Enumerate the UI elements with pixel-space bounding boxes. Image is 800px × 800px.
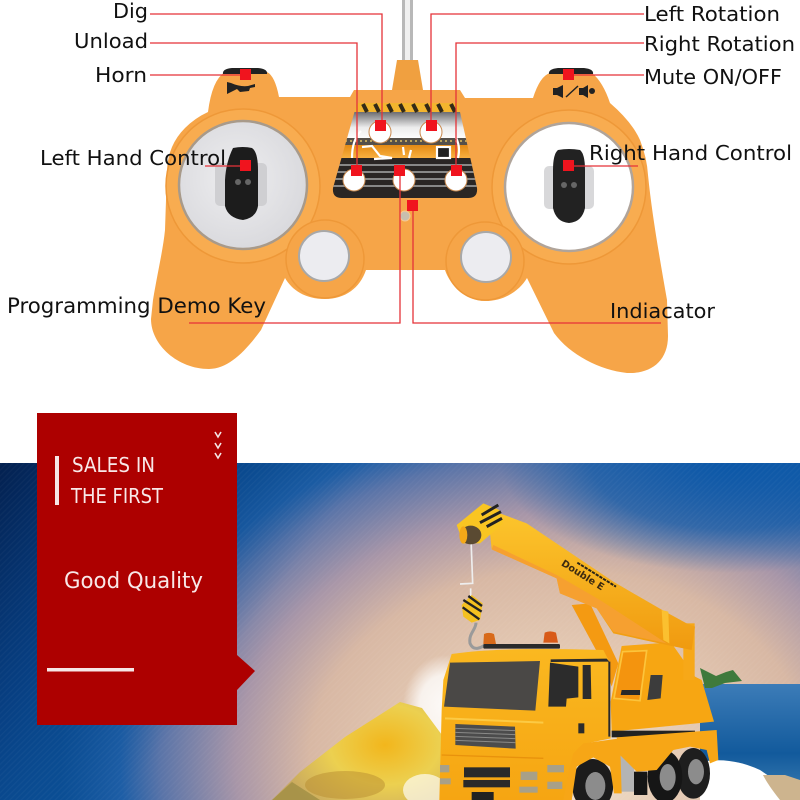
heading: SALES IN: SALES IN — [72, 453, 155, 477]
label: Indiacator: Indiacator — [610, 299, 716, 323]
mute icon — [553, 85, 595, 98]
antenna — [392, 0, 423, 90]
right joystick — [492, 110, 646, 264]
label: Programming Demo Key: Programming Demo Key — [7, 294, 266, 318]
label: Mute ON/OFF: Mute ON/OFF — [644, 65, 782, 89]
text: Good Quality: Good Quality — [64, 569, 203, 594]
horn icon — [227, 82, 255, 94]
chevrons — [215, 432, 221, 458]
crane cabin — [611, 623, 714, 732]
remote controller — [151, 0, 668, 373]
rope and hook — [460, 530, 487, 648]
front fender — [563, 738, 622, 800]
label: Left Rotation: Left Rotation — [644, 2, 780, 26]
sea and island — [700, 668, 800, 800]
front wheel — [572, 759, 613, 800]
label: Right Hand Control: Right Hand Control — [589, 141, 792, 165]
sky background banner — [0, 463, 800, 800]
boom arm — [490, 513, 695, 650]
right small button — [446, 222, 524, 300]
panel pictograms — [352, 131, 459, 159]
label: Left Hand Control: Left Hand Control — [40, 146, 226, 170]
label: Unload: Unload — [74, 29, 148, 53]
label: Horn: Horn — [95, 63, 147, 87]
vertical accent bar — [55, 456, 59, 505]
boom tip with hazard stripes — [457, 503, 503, 544]
beacon lights — [483, 631, 560, 649]
brand text on boom: Double E — [559, 558, 606, 593]
left shoulder button — [223, 68, 267, 74]
hazard stripe — [350, 103, 462, 112]
indicator LED — [400, 211, 410, 221]
left joystick — [166, 109, 320, 263]
label: Right Rotation: Right Rotation — [644, 32, 795, 56]
callout lines — [150, 14, 661, 323]
red promo panel — [37, 413, 255, 725]
left small button — [286, 220, 364, 298]
horizontal accent line — [47, 668, 134, 672]
heading: THE FIRST: THE FIRST — [70, 484, 164, 508]
controller body — [151, 70, 668, 373]
crane truck — [439, 503, 718, 800]
center function panel — [330, 103, 480, 200]
truck cab — [439, 649, 611, 800]
function buttons — [343, 121, 467, 191]
rear wheels — [620, 748, 710, 800]
glow behind truck — [403, 655, 487, 755]
golden foliage hill — [272, 702, 447, 800]
hydraulic arm — [572, 603, 618, 687]
chassis — [612, 730, 718, 772]
red callout markers — [240, 69, 574, 211]
right shoulder button — [549, 68, 593, 74]
